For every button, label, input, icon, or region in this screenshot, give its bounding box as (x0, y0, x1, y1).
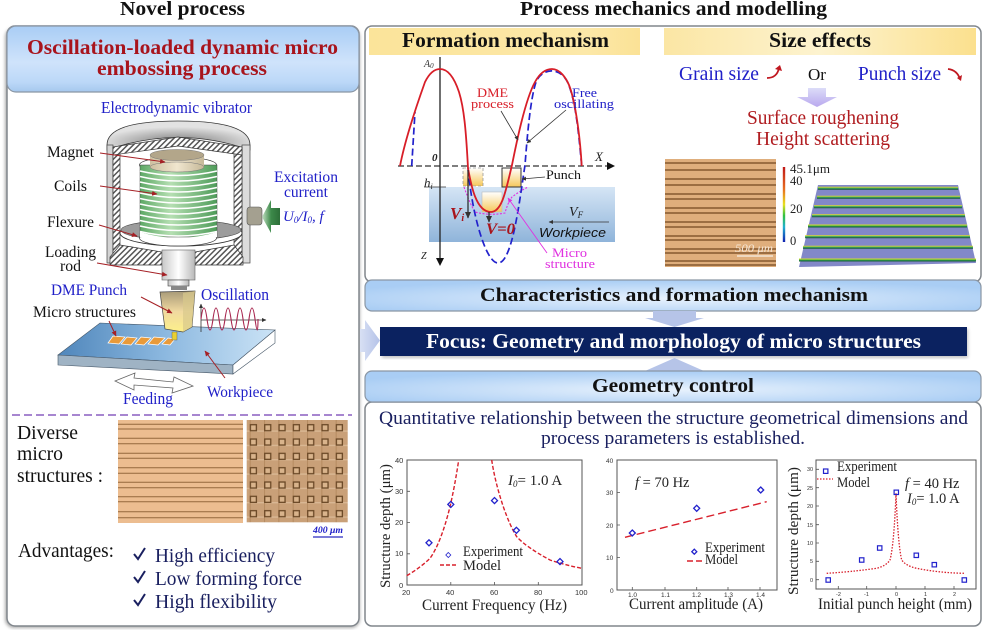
axis and curve labels: Z (421, 251, 427, 262)
axis and curve labels: process (471, 96, 514, 111)
advantages list: High flexibility (155, 591, 277, 613)
chart: depth vs current amplitude: Model (705, 552, 738, 568)
chart: depth vs current frequency: 30 (395, 487, 403, 496)
part labels: U (283, 209, 294, 225)
part labels (33, 144, 338, 401)
axis and curve labels: 0 (430, 62, 434, 70)
chart: depth vs current amplitude (606, 458, 777, 613)
axis and curve labels: V=0 (486, 221, 515, 238)
banner: characteristics and formation mechanism (365, 280, 981, 311)
chart: depth vs initial punch height: 5 (810, 559, 813, 565)
micrograph: square pit array: 400 μm (312, 526, 343, 536)
text: quantitative relationship (379, 408, 968, 449)
banner: geometry control: Geometry control (592, 375, 754, 397)
text: quantitative relationship: process parameters is established. (541, 428, 805, 449)
chart: depth vs initial punch height: I (906, 491, 913, 507)
banner: characteristics and formation mechanism: Characteristics and formation mechanism (480, 285, 868, 306)
leader lines (424, 110, 609, 222)
advantages list (18, 540, 302, 613)
loading rod (162, 250, 195, 290)
focus bar (380, 327, 968, 358)
text: grain size or punch size: Grain size (679, 63, 759, 85)
axis and curve labels: structure (545, 256, 595, 271)
part labels: Loading (45, 244, 96, 261)
chart: depth vs current amplitude: Experiment (705, 540, 766, 556)
chart: depth vs current frequency: Structure depth (μm) (378, 464, 394, 588)
magnet (150, 150, 204, 172)
free oscillating curve (412, 71, 582, 263)
chart: depth vs initial punch height: 0 (912, 497, 917, 507)
chart: depth vs initial punch height: 20 (807, 504, 813, 510)
chart: depth vs initial punch height: 30 (807, 467, 813, 473)
excitation input connector and arrow (247, 200, 280, 233)
micro structures on plate (108, 336, 175, 345)
colour scale: 40 (790, 174, 802, 188)
chart: depth vs current frequency: 40 (395, 456, 403, 465)
chart: depth vs current frequency: 20 (395, 518, 403, 527)
chart: depth vs current amplitude: 40 (606, 458, 614, 465)
banner: geometry control (365, 371, 981, 402)
axis and curve labels: Punch (546, 167, 582, 182)
part labels: Micro structures (33, 304, 136, 321)
chart: depth vs current frequency: = 1.0 A (518, 473, 562, 489)
leader arrows (97, 153, 225, 378)
axis and curve labels: i (430, 182, 433, 191)
part labels: Flexure (47, 214, 94, 231)
text: grain size or punch size (679, 63, 962, 85)
part labels: 0 (294, 215, 299, 225)
chart: depth vs current frequency: 80 (534, 588, 542, 597)
chart: depth vs initial punch height: Model (837, 475, 870, 491)
chart: depth vs initial punch height: 0 (810, 578, 813, 584)
part labels: current (284, 184, 329, 201)
part labels: Workpiece (207, 384, 273, 401)
axis and curve labels: 0 (432, 152, 438, 164)
chart: depth vs initial punch height: 2 (953, 592, 956, 598)
chart: depth vs current amplitude: 1.3 (724, 592, 733, 599)
DME process curve (400, 69, 582, 212)
part labels: Excitation (274, 169, 338, 186)
chart: depth vs initial punch height (786, 459, 976, 613)
part labels: Coils (54, 178, 87, 195)
chart: depth vs current frequency: 100 (575, 588, 588, 597)
axis and curve labels: Free (572, 85, 597, 100)
chart: depth vs current amplitude: 1.4 (756, 592, 765, 599)
colour scale: 0 (790, 234, 796, 248)
chart: depth vs current amplitude: 1.2 (692, 592, 701, 599)
arrow: up into focus (645, 358, 704, 371)
label: diverse micro structures (17, 422, 103, 487)
chart: depth vs initial punch height: 15 (807, 523, 813, 529)
focus bar: Focus: Geometry and morphology of micro structures (426, 329, 921, 353)
text: surface roughening, height scattering (747, 107, 899, 150)
chart: depth vs initial punch height: 1 (924, 592, 927, 598)
axis and curve labels (421, 59, 615, 271)
label: diverse micro structures: Diverse (17, 422, 78, 444)
3D surface map (799, 185, 976, 267)
diagram: electrodynamic vibrator (101, 98, 280, 290)
coil windings (140, 171, 217, 236)
oscillation waveform (201, 285, 269, 332)
micrograph: line grooves (118, 420, 243, 523)
axis and curve labels: V (450, 204, 461, 223)
panel: novel process (5, 26, 360, 628)
chart: depth vs initial punch height: -1 (864, 592, 869, 598)
colour scale: 45.1μm (790, 162, 830, 176)
micrograph: square pit array (247, 420, 348, 537)
chart: depth vs current amplitude: 10 (606, 555, 614, 562)
colour scale (783, 162, 830, 248)
chart: depth vs current frequency: 40 (446, 588, 454, 597)
advantages list: High efficiency (155, 545, 275, 567)
axis and curve labels: Workpiece (539, 225, 606, 240)
DME punch (160, 291, 195, 340)
chart: depth vs initial punch height: Structure depth (μm) (786, 467, 802, 595)
axis and curve labels: Micro (552, 245, 587, 260)
chart: depth vs current amplitude: 1.1 (661, 592, 670, 599)
part labels: rod (60, 258, 81, 275)
chart: depth vs initial punch height: = 1.0 A (916, 491, 960, 507)
part labels: /I (297, 209, 309, 225)
axis and curve labels: X (594, 149, 604, 164)
part labels: DME Punch (51, 282, 127, 299)
chart: depth vs initial punch height: Experiment (837, 459, 898, 475)
colour scale: 20 (790, 202, 802, 216)
advantages list: Low forming force (155, 568, 302, 590)
chart: depth vs current frequency: I (507, 473, 514, 489)
axis and curve labels: oscillating (554, 96, 615, 111)
chart: depth vs initial punch height: 0 (895, 592, 898, 598)
chart: depth vs current frequency: 20 (402, 588, 410, 597)
text: quantitative relationship: Quantitative relationship between the structure geometrical dimensions and (379, 408, 968, 429)
arrow: down into focus (645, 311, 704, 327)
chart: depth vs current frequency (378, 456, 588, 614)
chart: depth vs current frequency: Current Frequency (Hz) (422, 597, 567, 614)
chart: depth vs initial punch height: 25 (807, 486, 813, 492)
heading: formation mechanism (369, 28, 640, 55)
text: grain size or punch size: Or (808, 65, 826, 84)
advantages list: Advantages: (18, 540, 114, 562)
chart: depth vs current amplitude: 20 (606, 523, 614, 530)
part labels: , f (312, 209, 326, 225)
heading: size effects: Size effects (769, 28, 871, 52)
chart: depth vs current frequency: 60 (490, 588, 498, 597)
chart: depth vs current amplitude: 1.0 (628, 592, 637, 599)
label: diverse micro structures: structures : (17, 465, 103, 487)
oscillation waveform: Oscillation (201, 285, 269, 304)
chart: formation mechanism (398, 57, 615, 271)
part labels: 0 (308, 215, 313, 225)
axis and curve labels: A (424, 59, 430, 70)
header banner: oscillation-loaded process: embossing process (97, 56, 267, 80)
axis and curve labels: F (577, 210, 584, 220)
chart: depth vs initial punch height: 10 (807, 541, 813, 547)
chart: depth vs initial punch height: f = 40 Hz (905, 476, 960, 492)
feeding arrow: Feeding (123, 389, 173, 408)
chart: depth vs current amplitude: 0 (610, 588, 614, 595)
punch positions (463, 168, 521, 212)
chart: depth vs current frequency: 0 (513, 479, 518, 489)
workpiece plate (58, 323, 275, 374)
part labels: Magnet (47, 144, 95, 161)
arrow: size effects result (797, 88, 837, 107)
label: diverse micro structures: micro (17, 443, 63, 465)
chart: depth vs current frequency: Experiment (463, 544, 524, 560)
micrograph: surface grooves: 500 μm (735, 241, 773, 255)
header banner: oscillation-loaded process: Oscillation-loaded dynamic micro (27, 35, 338, 59)
chart: depth vs initial punch height: Initial punch height (mm) (818, 596, 972, 613)
micro structure profile (464, 187, 528, 214)
arrow: novel process into focus (360, 320, 380, 361)
chart: depth vs current frequency: 10 (395, 549, 403, 558)
panel: mechanics top (365, 26, 981, 282)
chart: depth vs current frequency: Model (463, 558, 501, 574)
micrograph: surface grooves (665, 159, 776, 267)
diagram: electrodynamic vibrator: Electrodynamic vibrator (101, 98, 252, 117)
feeding arrow (115, 373, 193, 408)
header banner: oscillation-loaded process (7, 26, 359, 92)
chart: depth vs initial punch height: -2 (836, 592, 841, 598)
axis and curve labels: DME (477, 85, 508, 100)
chart: depth vs current amplitude: 30 (606, 490, 614, 497)
chart: depth vs current amplitude: Current amplitude (A) (629, 596, 763, 613)
text: surface roughening, height scattering: Height scattering (756, 128, 890, 150)
axis and curve labels: h (424, 175, 430, 190)
panel: geometry control (365, 371, 981, 626)
text: grain size or punch size: Punch size (858, 63, 941, 85)
text: surface roughening, height scattering: Surface roughening (747, 107, 899, 129)
chart: depth vs current amplitude: f = 70 Hz (635, 475, 690, 491)
axis and curve labels: V (569, 205, 578, 220)
chart: depth vs current frequency: 0 (399, 581, 403, 590)
heading: size effects (664, 28, 976, 55)
heading: formation mechanism: Formation mechanism (402, 28, 610, 52)
axis and curve labels: i (461, 213, 464, 224)
